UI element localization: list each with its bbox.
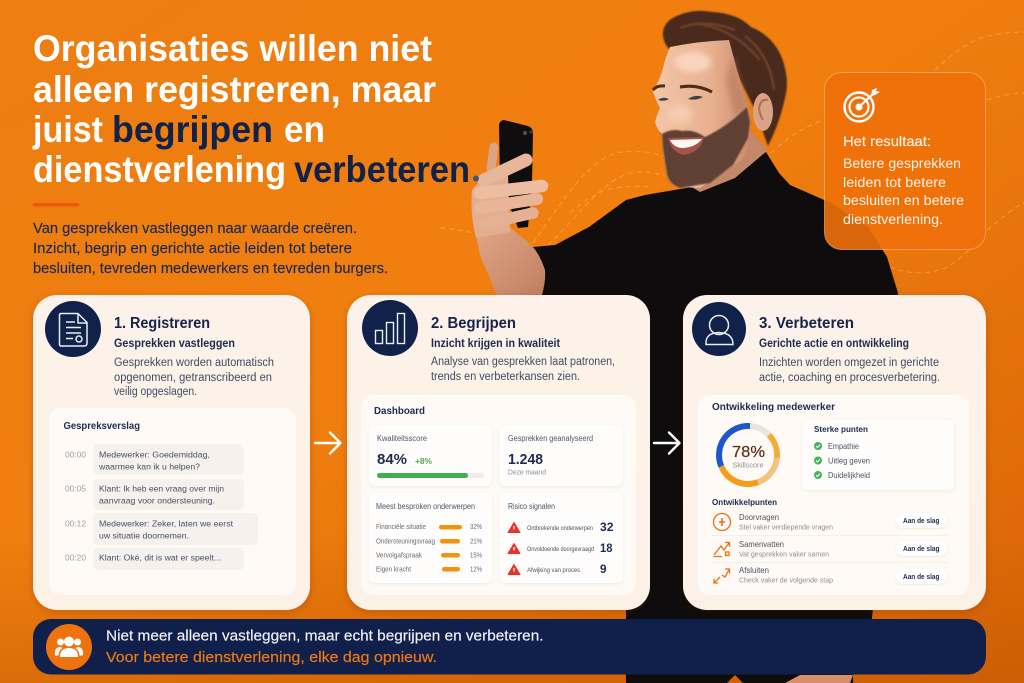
skillscore donut xyxy=(719,426,777,484)
arm xyxy=(474,225,545,295)
buttons: Aan de slag xyxy=(903,544,940,553)
meest besproken onderwerpen: Vervolgafspraak xyxy=(376,550,422,560)
buttons: Aan de slag xyxy=(903,516,940,525)
panel: begrijpen: trends en verbeterkansen zien. xyxy=(431,371,580,383)
meest besproken onderwerpen: 15% xyxy=(470,550,482,560)
transcript panel xyxy=(49,408,296,595)
ontwikkeling medewerker xyxy=(698,395,969,595)
transcript panel: Medewerker: Zeker, laten we eerst xyxy=(99,518,234,528)
dashboard xyxy=(361,395,636,595)
risico signalen xyxy=(499,493,623,583)
transcript panel: Klant: Oké, dit is wat er speelt... xyxy=(99,552,221,562)
meest besproken onderwerpen: Meest besproken onderwerpen xyxy=(376,502,475,511)
title: en xyxy=(284,109,325,150)
panel: begrijpen xyxy=(347,295,650,610)
risico signalen: Risico signalen xyxy=(508,502,555,511)
risico signalen: Onvoldoende doorgevraagd xyxy=(527,546,594,553)
icon: afsluiten xyxy=(714,569,730,583)
meest besproken onderwerpen: Eigen kracht xyxy=(376,564,411,574)
icon: person xyxy=(692,302,746,356)
transcript panel: Gespreksverslag xyxy=(64,420,140,432)
kwaliteitsscore: +8% xyxy=(415,457,432,466)
icon: doorvragen xyxy=(714,514,730,530)
panel: registreren: opgenomen, getranscribeerd en xyxy=(114,372,272,384)
hair xyxy=(663,11,787,146)
panel: registreren: Gesprekken worden automatisch xyxy=(114,357,274,369)
transcript panel: aanvraag voor ondersteuning. xyxy=(99,496,215,506)
banner xyxy=(33,619,986,674)
intro text: besluiten, tevreden medewerkers en tevreden burgers. xyxy=(33,260,388,277)
ontwikkelpunten: Vat gesprekken vaker samen xyxy=(739,550,829,558)
neck xyxy=(690,125,768,192)
panel: verbeteren: Inzichten worden omgezet in gerichte xyxy=(759,357,939,369)
phone xyxy=(499,120,533,228)
meest besproken onderwerpen: 32% xyxy=(470,522,482,531)
kwaliteitsscore xyxy=(369,425,492,486)
sterke punten: Uitleg geven xyxy=(828,456,870,466)
ontwikkelpunten: Samenvatten xyxy=(739,539,784,549)
callout: het resultaat: Het resultaat: xyxy=(843,133,931,149)
title: juist xyxy=(32,109,103,150)
icon: people xyxy=(46,624,92,670)
ontwikkelpunten: Check vaker de volgende stap xyxy=(739,576,833,584)
risico signalen: Afwijking van proces xyxy=(527,567,581,574)
face xyxy=(653,40,751,188)
person with phone xyxy=(472,11,898,683)
ear xyxy=(753,93,773,131)
panel: registreren xyxy=(33,295,310,610)
ontwikkelpunten: Doorvragen xyxy=(739,512,779,522)
teeth xyxy=(670,139,702,148)
panel: begrijpen: 2. Begrijpen xyxy=(431,315,516,332)
banner: Voor betere dienstverlening, elke dag opnieuw. xyxy=(106,649,437,666)
icon: bar chart xyxy=(362,300,418,356)
hand xyxy=(472,147,542,238)
ontwikkelpunten: Stel vaker verdiepende vragen xyxy=(739,522,833,532)
dashboard: Dashboard xyxy=(374,405,425,417)
gesprekken geanalyseerd xyxy=(499,425,623,486)
arrow: begrijpen naar verbeteren xyxy=(654,432,680,454)
ontwikkelpunten: Afsluiten xyxy=(739,565,769,575)
panel: verbeteren: actie, coaching en procesverbetering. xyxy=(759,372,940,384)
callout: het resultaat xyxy=(824,72,986,250)
kwaliteitsscore: 84% xyxy=(377,451,407,468)
title: alleen registreren, maar xyxy=(33,69,436,110)
panel: verbeteren: 3. Verbeteren xyxy=(759,315,854,332)
smile xyxy=(668,137,704,155)
transcript panel: 00:05 xyxy=(65,484,86,494)
intro text xyxy=(33,220,388,277)
hand at bottom xyxy=(785,675,853,683)
icon: warnings xyxy=(508,522,520,574)
risico signalen: 32 xyxy=(600,520,614,534)
sterke punten: Sterke punten xyxy=(814,424,868,434)
callout: het resultaat: besluiten en betere xyxy=(843,192,964,208)
icon: samenvatten xyxy=(714,542,730,556)
transcript panel: waarmee kan ik u helpen? xyxy=(98,462,200,472)
panel: verbeteren xyxy=(683,295,986,610)
icon: document xyxy=(45,301,101,357)
panel: registreren: Gesprekken vastleggen xyxy=(114,336,235,350)
sweater xyxy=(530,152,898,683)
buttons xyxy=(896,513,947,584)
title: begrijpen xyxy=(112,109,273,150)
meest besproken onderwerpen: Financiële situatie xyxy=(376,522,426,531)
ontwikkeling medewerker: Ontwikkeling medewerker xyxy=(712,401,835,413)
meest besproken onderwerpen xyxy=(369,493,492,583)
gesprekken geanalyseerd: 1.248 xyxy=(508,451,543,468)
sterke punten: Empathie xyxy=(828,442,860,451)
panel: verbeteren: Gerichte actie en ontwikkeling xyxy=(759,336,909,350)
meest besproken onderwerpen: 21% xyxy=(470,536,482,546)
ontwikkelpunten: Ontwikkelpunten xyxy=(712,497,777,507)
ontwikkelpunten xyxy=(712,497,948,584)
title: dienstverlening xyxy=(33,149,286,190)
buttons: Aan de slag xyxy=(903,572,940,581)
intro text: Van gesprekken vastleggen naar waarde creëren. xyxy=(33,220,357,237)
hair strands xyxy=(680,23,774,90)
panel: registreren: 1. Registreren xyxy=(114,315,210,332)
eyes and brows xyxy=(653,86,712,101)
icon: target xyxy=(844,88,880,122)
transcript panel: 00:00 xyxy=(65,450,86,460)
intro text: Inzicht, begrip en gerichte actie leiden tot betere xyxy=(33,240,352,257)
risico signalen: 18 xyxy=(600,541,613,555)
title xyxy=(32,28,479,190)
kwaliteitsscore: Kwaliteitsscore xyxy=(377,434,428,443)
transcript panel: 00:12 xyxy=(65,518,86,528)
banner: Niet meer alleen vastleggen, maar echt begrijpen en verbeteren. xyxy=(106,628,544,644)
panel: begrijpen: Inzicht krijgen in kwaliteit xyxy=(431,336,560,350)
beard xyxy=(662,107,750,188)
skillscore donut: 78% xyxy=(732,444,765,461)
callout: het resultaat: Betere gesprekken xyxy=(843,155,961,171)
sterke punten: Duidelijkheid xyxy=(828,471,870,480)
panel: begrijpen: Analyse van gesprekken laat patronen, xyxy=(431,356,615,368)
meest besproken onderwerpen: 12% xyxy=(470,564,482,574)
dashed wave lines xyxy=(440,32,1024,273)
risico signalen: 9 xyxy=(600,562,607,576)
skillscore donut: Skillscore xyxy=(732,460,764,470)
callout: het resultaat: leiden tot betere xyxy=(843,174,946,190)
gesprekken geanalyseerd: Deze maand xyxy=(508,468,546,476)
transcript panel: Klant: Ik heb een vraag over mijn xyxy=(99,484,224,494)
accent bar xyxy=(33,203,79,206)
meest besproken onderwerpen: Ondersteuningsvraag xyxy=(376,536,435,546)
callout: het resultaat: dienstverlening. xyxy=(843,211,943,227)
gesprekken geanalyseerd: Gesprekken geanalyseerd xyxy=(508,434,593,443)
panel: registreren: veilig opgeslagen. xyxy=(114,386,197,398)
transcript panel: 00:20 xyxy=(65,552,86,562)
title: verbeteren xyxy=(294,149,470,190)
transcript panel: Medewerker: Goedemiddag, xyxy=(99,450,210,460)
title: Organisaties willen niet xyxy=(33,28,432,69)
arrow: registreren naar begrijpen xyxy=(315,432,340,454)
sterke punten xyxy=(802,420,954,490)
face highlights xyxy=(668,52,746,123)
risico signalen: Ontbrekende onderwerpen xyxy=(527,525,593,532)
transcript panel: uw situatie doornemen. xyxy=(99,530,189,540)
